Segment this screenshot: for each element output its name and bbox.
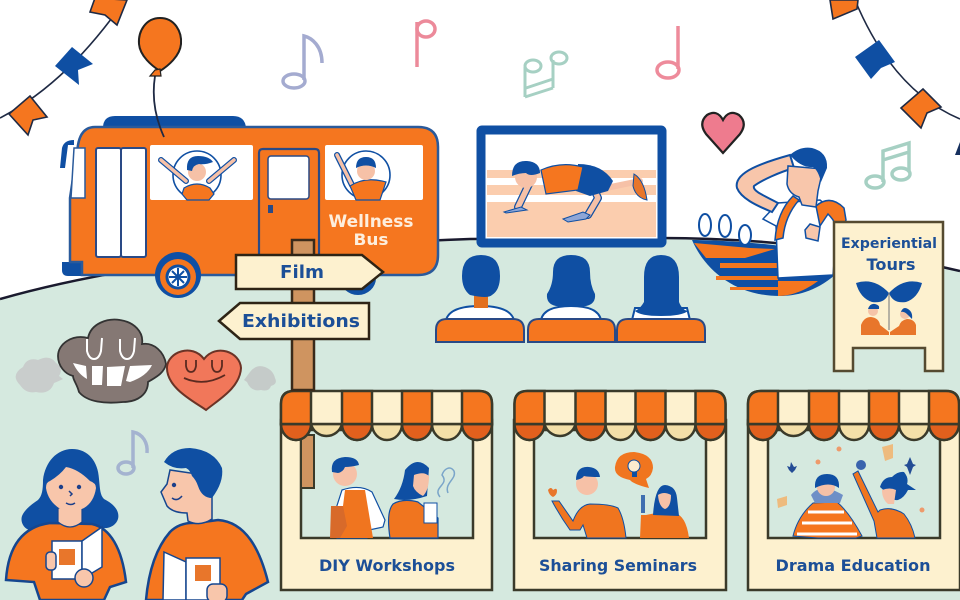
panel: experiential tours sign (834, 222, 943, 371)
right bunting (830, 0, 960, 155)
thought bubble (615, 452, 653, 488)
person: man reading (146, 448, 268, 600)
cloud face (58, 320, 166, 403)
screen track stripes (487, 170, 656, 237)
panel: experiential tours sign: Tours (866, 255, 916, 274)
push-up figure (504, 161, 647, 222)
speaker figure (548, 467, 626, 538)
icon: sprout with people (856, 281, 922, 335)
panel: wellness bus (60, 116, 438, 298)
sign: exhibitions: Exhibitions (242, 311, 360, 332)
book (163, 552, 220, 600)
wheels (155, 252, 201, 298)
viewer middle (528, 255, 615, 342)
caption: Sharing Seminars (539, 556, 697, 575)
icon: note lavender (283, 36, 322, 88)
icon: note in lawn (118, 432, 147, 474)
post behind awning (301, 435, 314, 488)
viewer right (617, 255, 705, 342)
striped singer (793, 474, 862, 538)
windshield (71, 148, 85, 198)
background ground (0, 238, 960, 600)
panel: film screen (481, 130, 662, 243)
person: woman reading (6, 449, 126, 600)
stall 2: sharing seminars (514, 391, 726, 590)
bus windows (150, 145, 253, 200)
worker figure (330, 457, 385, 538)
caption: Drama Education (776, 556, 930, 575)
stall 3: drama education (748, 391, 960, 590)
caption: DIY Workshops (319, 556, 455, 575)
viewer left (436, 255, 524, 342)
sign text: Experiential (841, 236, 937, 252)
hiker head (787, 166, 823, 207)
heart face (167, 351, 241, 410)
bus label: Wellness (328, 212, 414, 231)
hiker hand (805, 224, 820, 241)
striped hill (692, 240, 835, 296)
sign: exhibitions (219, 303, 369, 339)
shrubs (699, 214, 751, 245)
icon: double note mint (525, 52, 567, 97)
bus body (70, 127, 438, 275)
woman thinking (640, 485, 689, 538)
icon: double note mint right (866, 143, 910, 188)
panel: wellness bus: Bus (354, 230, 388, 249)
sign: film: Film (280, 262, 324, 283)
smoke puffs (16, 358, 276, 393)
mirror and lamps (60, 140, 82, 276)
hands (46, 552, 93, 587)
front doors (96, 148, 146, 257)
backpack strap (775, 196, 846, 240)
sign: film (236, 255, 383, 289)
bus roof (103, 116, 246, 128)
woman with cup (389, 462, 454, 538)
icon: note pink (657, 26, 679, 78)
passenger right (337, 151, 390, 200)
signpost (219, 240, 383, 390)
icon: smiling cloud and heart (16, 320, 276, 410)
hand (207, 584, 227, 600)
panel: hiker with striped hill (692, 148, 846, 296)
post (292, 240, 314, 390)
bus door (259, 149, 319, 260)
left bunting (0, 0, 127, 135)
raised arm singer (853, 460, 916, 538)
passenger left (161, 151, 234, 200)
hiker arm (737, 155, 794, 212)
music notes (118, 21, 910, 474)
icon: note pink flag (417, 21, 435, 67)
panel: audience (436, 255, 705, 342)
icon: balloon (139, 18, 181, 137)
hiker hair (790, 148, 827, 182)
music and sparkle decoration (777, 444, 924, 512)
book (52, 527, 102, 579)
stall 1: DIY workshops (281, 391, 492, 590)
icon: heart (702, 113, 744, 153)
hiker body (763, 200, 838, 278)
